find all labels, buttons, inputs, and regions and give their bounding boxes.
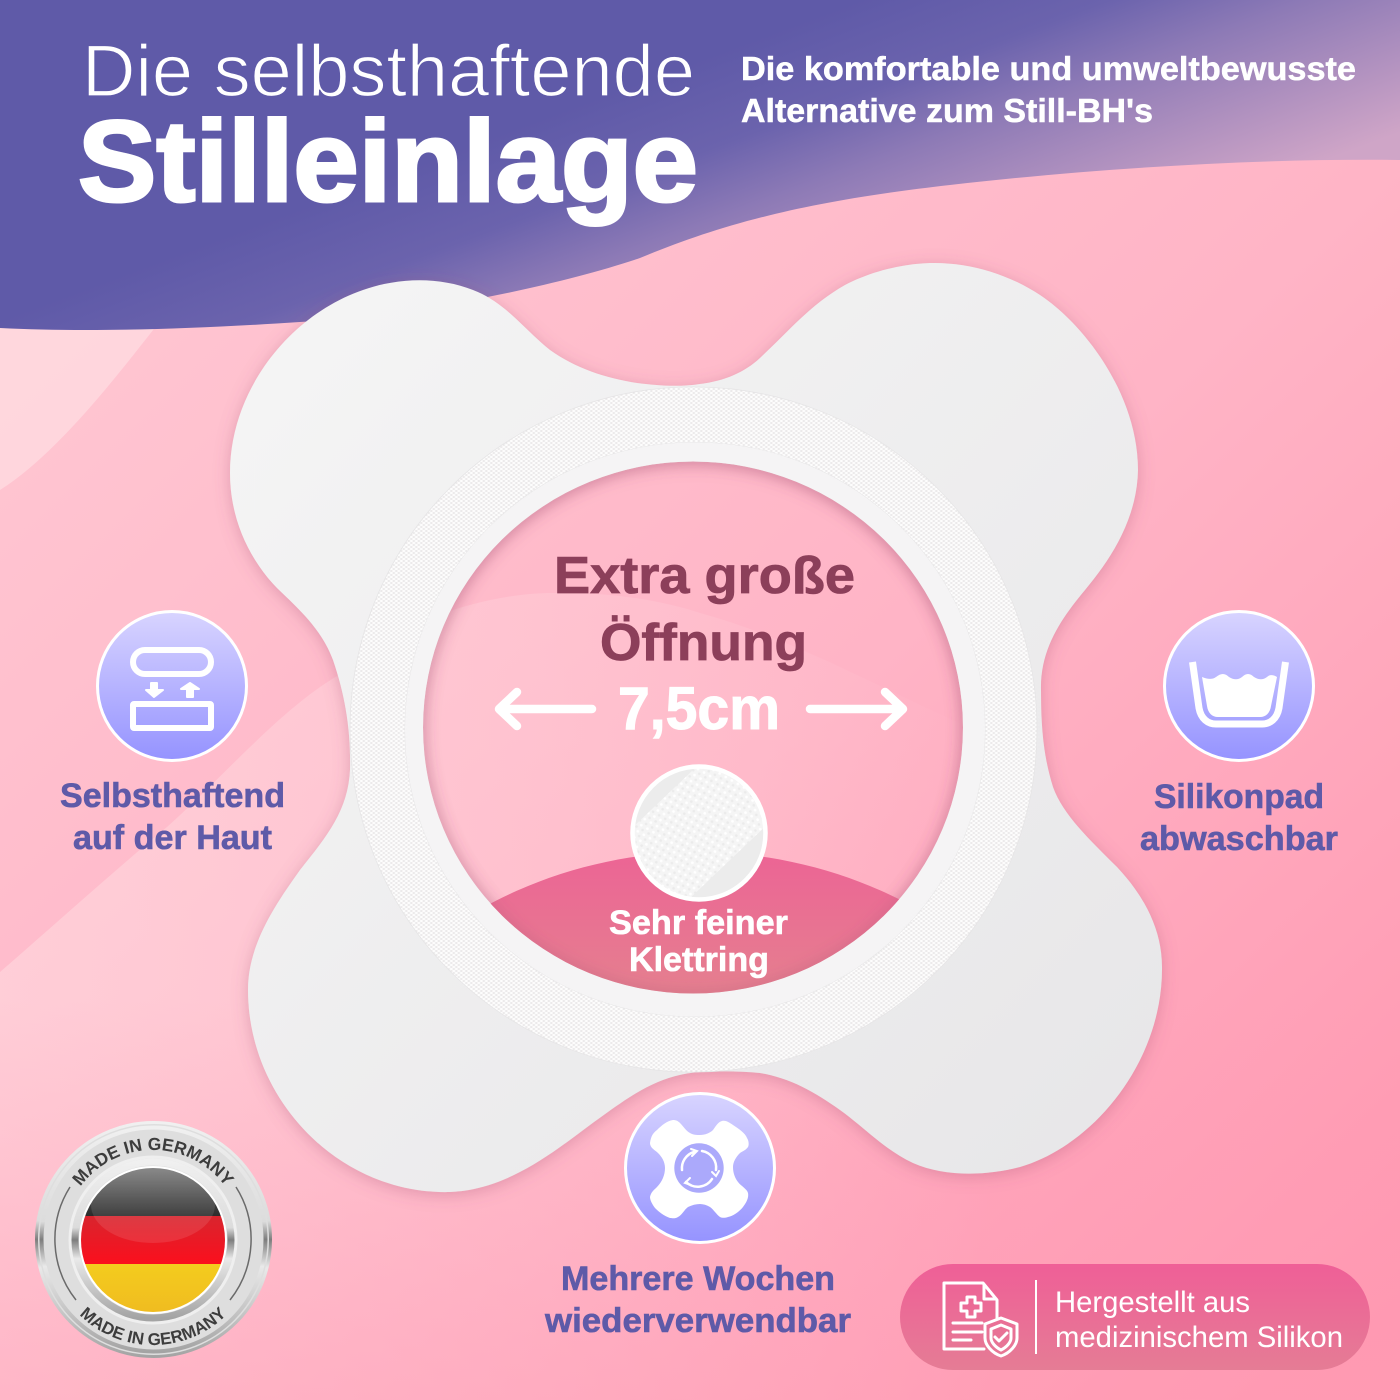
icon: reusable xyxy=(626,1094,774,1242)
badge: made in germany: MADE IN GERMANY xyxy=(72,1138,235,1186)
loupe: velcro detail xyxy=(630,765,770,901)
badge: made in germany: MADE IN GERMANY xyxy=(80,1306,224,1346)
icon: self-adhesive xyxy=(98,612,246,760)
hole inner shadow xyxy=(422,460,964,994)
recycle arrows xyxy=(682,1149,719,1187)
german flag xyxy=(80,1167,226,1312)
label: velcro ring xyxy=(609,904,788,979)
pill: medical silicone xyxy=(900,1264,1370,1370)
inner smooth ring xyxy=(405,442,985,1017)
divider xyxy=(1035,1280,1037,1354)
label: self-adhesive: Selbsthaftend xyxy=(60,777,285,815)
silicone pad product xyxy=(230,263,1162,1192)
callout: extra large opening: 7,5cm xyxy=(618,675,780,742)
label: washable: abwaschbar xyxy=(1140,820,1338,858)
badge arc lines xyxy=(55,1187,251,1300)
label: velcro ring: Klettring xyxy=(629,941,769,979)
pill text xyxy=(1055,1286,1343,1354)
callout: extra large opening: Extra große xyxy=(554,547,855,605)
label: self-adhesive xyxy=(60,777,285,857)
label: reusable: wiederverwendbar xyxy=(544,1302,851,1340)
label: reusable xyxy=(544,1260,851,1340)
icon: washable xyxy=(1164,612,1314,760)
icon: medical document with shield xyxy=(944,1283,1017,1356)
velcro ring xyxy=(350,387,1037,1072)
title: Stilleinlage xyxy=(78,98,698,226)
pink arc behind velcro label xyxy=(490,856,900,994)
subtitle: Alternative zum Still-BH's xyxy=(741,92,1153,129)
subtitle: Die komfortable und umweltbewusste xyxy=(741,50,1356,87)
callout: extra large opening xyxy=(499,547,903,742)
label: washable: Silikonpad xyxy=(1154,778,1324,816)
arrow left xyxy=(499,692,592,726)
label: reusable: Mehrere Wochen xyxy=(561,1260,835,1298)
label: self-adhesive: auf der Haut xyxy=(73,819,272,857)
background waves xyxy=(0,325,1400,1400)
title: Die selbsthaftende xyxy=(82,31,695,112)
arrow right xyxy=(810,692,903,726)
title xyxy=(78,31,698,226)
callout: extra large opening: Öffnung xyxy=(600,614,807,672)
pill text: medizinischem Silikon xyxy=(1055,1321,1343,1354)
label: velcro ring: Sehr feiner xyxy=(609,904,788,942)
label: washable xyxy=(1140,778,1338,858)
pill text: Hergestellt aus xyxy=(1055,1286,1250,1319)
subtitle xyxy=(741,50,1356,129)
badge: made in germany xyxy=(35,1121,272,1358)
header band xyxy=(0,0,1400,330)
